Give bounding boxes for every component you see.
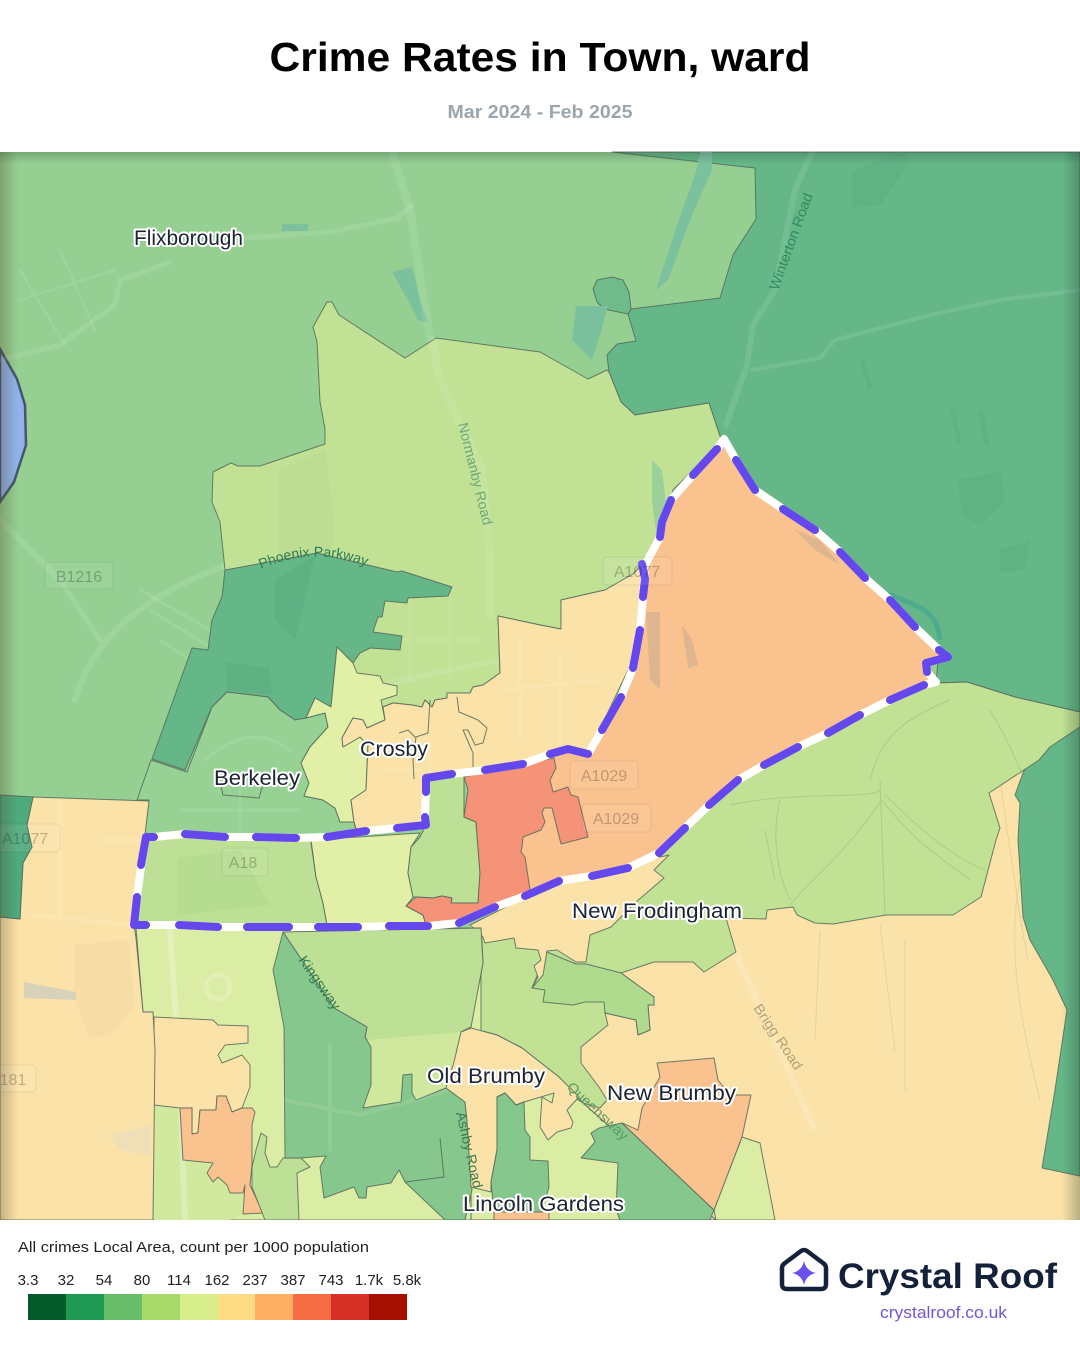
ward boundary: white line bbox=[134, 439, 948, 927]
road label: Kingsway: Kingsway bbox=[296, 953, 344, 1013]
region: dark green rural north-east bbox=[607, 152, 1080, 712]
map edge vignette bbox=[0, 152, 1080, 1220]
place label: Flixborough: Flixborough bbox=[134, 227, 243, 250]
road label: Winterton Road: Winterton Road bbox=[766, 191, 816, 292]
logo wordmark: Crystal Roof bbox=[838, 1257, 1057, 1296]
region: Old Brumby peach bbox=[446, 1028, 579, 1192]
region: west peach bbox=[0, 797, 155, 1220]
region: Queensway green bbox=[581, 1123, 714, 1220]
region: Berkeley green bbox=[137, 692, 358, 838]
icon: house outline bbox=[782, 1250, 826, 1289]
region: darker lime patch bbox=[532, 952, 654, 1035]
place label: Berkeley: Berkeley bbox=[214, 767, 301, 790]
region: east industrial lines bbox=[815, 780, 1040, 1100]
road label: Queensway: Queensway bbox=[564, 1078, 632, 1143]
road shield: A181: 181 bbox=[0, 1072, 26, 1089]
icon: purple star bbox=[792, 1261, 816, 1285]
legend bbox=[18, 1239, 422, 1320]
region: dark green far east bbox=[1015, 712, 1080, 1176]
road shield: A1077 north bbox=[603, 557, 672, 585]
title: Crime Rates in Town, ward bbox=[270, 34, 810, 80]
region: ward orange spots bbox=[646, 530, 840, 690]
region: subtle rural patches bbox=[852, 152, 1030, 572]
region: water bodies bbox=[282, 152, 712, 360]
legend tick labels: 114 bbox=[167, 1272, 191, 1289]
road shield: A1077 west: A1077 bbox=[2, 831, 48, 848]
region: lime roads bbox=[360, 340, 500, 690]
legend tick labels: 237 bbox=[242, 1272, 268, 1289]
region: pale Crosby west bbox=[301, 647, 397, 822]
region: Kingsway green bbox=[273, 932, 472, 1220]
road label: Ashby Road: Ashby Road bbox=[453, 1110, 486, 1190]
place label: New Frodingham: New Frodingham bbox=[572, 900, 742, 923]
region: dark green blob bbox=[593, 277, 631, 314]
region: ward lime centre bbox=[408, 772, 480, 903]
region: ward west lime bbox=[134, 835, 327, 925]
road shield: B1216 bbox=[45, 562, 113, 589]
legend tick labels: 1.7k bbox=[355, 1272, 384, 1289]
region: ward orange bbox=[500, 439, 948, 892]
subtitle: date range: Mar 2024 - Feb 2025 bbox=[448, 101, 632, 122]
road shield: A18: A18 bbox=[229, 855, 257, 872]
region: Lincoln Gardens orange bbox=[494, 1212, 549, 1220]
legend tick labels bbox=[18, 1272, 422, 1289]
legend tick labels: 5.8k bbox=[393, 1272, 422, 1289]
legend colour ramp bbox=[28, 1294, 407, 1320]
panel: choropleth map bbox=[0, 152, 1080, 1220]
legend title: All crimes Local Area, count per 1000 population bbox=[18, 1239, 369, 1256]
region: Normanby lime area bbox=[212, 302, 724, 707]
region: ward pale centre bbox=[311, 833, 426, 925]
region: dark green Phoenix Parkway estate bbox=[152, 553, 452, 770]
region: rail lines bbox=[730, 700, 1045, 915]
legend tick labels: 54 bbox=[96, 1272, 112, 1289]
road label: Brigg Road: Brigg Road bbox=[751, 1001, 806, 1073]
road shield: A181 bbox=[0, 1065, 36, 1092]
legend tick labels: 387 bbox=[280, 1272, 306, 1289]
region: pale south centre bbox=[471, 1028, 716, 1220]
legend tick labels: 32 bbox=[58, 1272, 74, 1289]
region: peach south-east bbox=[470, 683, 1080, 1220]
region: west patches bbox=[24, 800, 150, 1155]
region: New Brumby orange bbox=[622, 1058, 751, 1210]
region: New Frodingham peach bbox=[470, 855, 669, 988]
place label: Lincoln Gardens: Lincoln Gardens bbox=[463, 1193, 624, 1216]
road label: Phoenix Parkway: Phoenix Parkway bbox=[258, 546, 369, 568]
road shield: A1029 upper: A1029 bbox=[581, 768, 627, 785]
ward boundary: purple dashes bbox=[134, 449, 948, 927]
road shield: A1077 north: A1077 bbox=[614, 564, 660, 581]
legend tick labels: 743 bbox=[318, 1272, 344, 1289]
place label: Crosby: Crosby bbox=[360, 738, 428, 761]
region: dark green west edge bbox=[0, 795, 33, 919]
road shield: A1029 lower bbox=[582, 804, 651, 832]
road shield: B1216: B1216 bbox=[56, 569, 102, 586]
region: pale south-east corner bbox=[714, 1137, 775, 1220]
place label: New Brumby: New Brumby bbox=[607, 1082, 737, 1105]
region: ward red bbox=[406, 758, 588, 925]
road shield: A1077 west bbox=[0, 824, 60, 852]
region: peach Crosby bbox=[342, 564, 643, 835]
region: lime patch bbox=[252, 1133, 310, 1220]
road shield: A1029 lower: A1029 bbox=[593, 811, 639, 828]
region: orange west estate bbox=[180, 1096, 263, 1214]
region: pale south-west bbox=[136, 928, 481, 1220]
region: Lincoln Gardens green bbox=[491, 1093, 549, 1212]
place label: Old Brumby: Old Brumby bbox=[427, 1065, 546, 1088]
logo: Crystal Roof bbox=[782, 1250, 1057, 1322]
region: rural lanes bbox=[0, 152, 1080, 700]
legend tick labels: 80 bbox=[134, 1272, 150, 1289]
region: lime south of ward bbox=[283, 928, 483, 1108]
footer background bbox=[0, 1220, 1080, 1350]
road shield: A18 bbox=[222, 848, 268, 876]
region: lime east steelworks and central bbox=[471, 682, 1080, 1108]
region: peach west of Kingsway bbox=[154, 1017, 250, 1134]
logo url: crystalroof.co.uk bbox=[880, 1304, 1008, 1322]
road label: Normanby Road: Normanby Road bbox=[455, 421, 496, 527]
region: river bbox=[0, 349, 26, 502]
road shield: A1029 upper bbox=[570, 761, 638, 789]
legend tick labels: 162 bbox=[204, 1272, 230, 1289]
legend tick labels: 3.3 bbox=[18, 1272, 38, 1289]
